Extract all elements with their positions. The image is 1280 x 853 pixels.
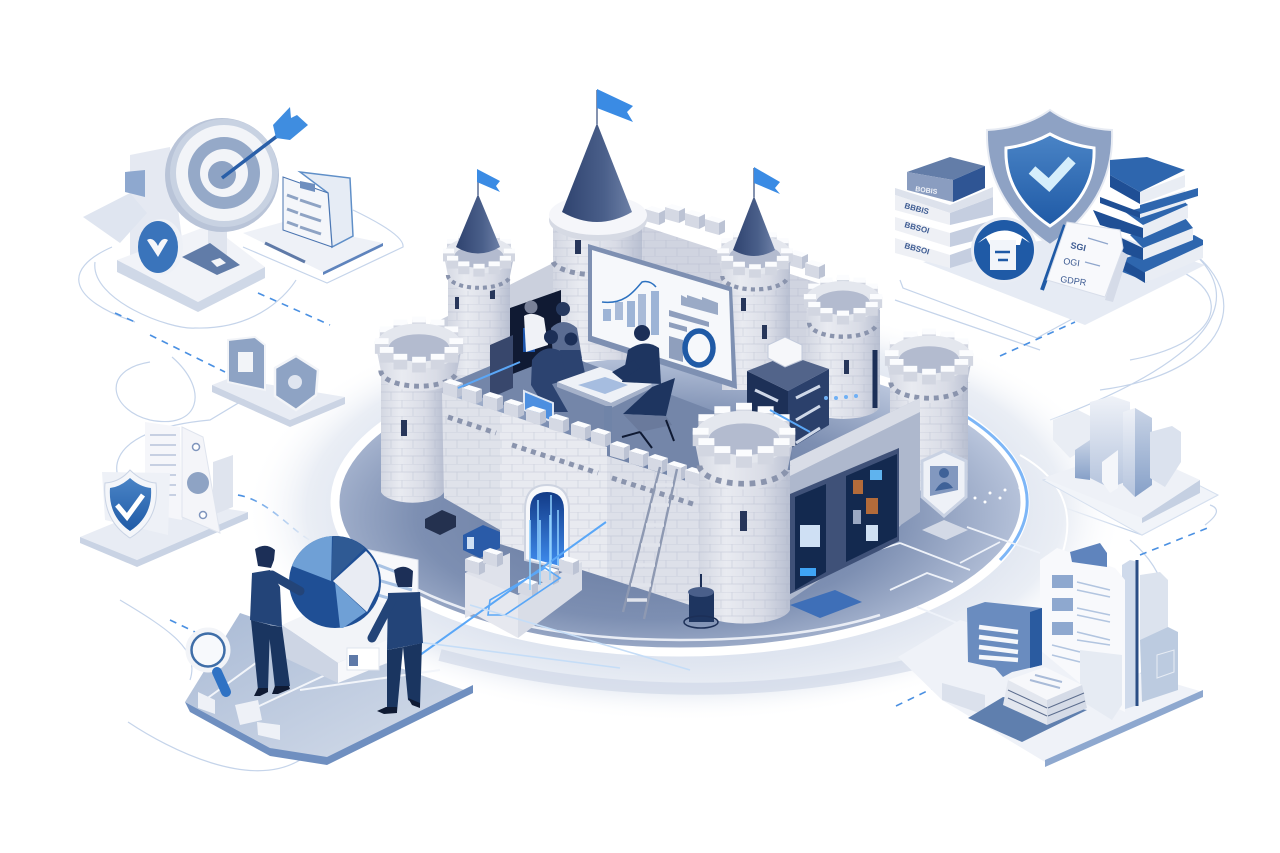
platform xyxy=(898,620,1203,767)
blue mat xyxy=(968,697,1087,742)
big back tower with cone and flag xyxy=(549,89,647,360)
vignette: shield and compliance, top right xyxy=(895,110,1205,325)
GDPR document: OGI xyxy=(1063,256,1080,268)
back wall xyxy=(640,204,870,380)
curved fin xyxy=(182,427,220,533)
shield with check xyxy=(105,470,156,538)
shield tile xyxy=(275,356,318,410)
check badge xyxy=(138,219,183,275)
base disc: outer halo xyxy=(245,298,1125,722)
blue dashed flow lines xyxy=(115,293,1210,706)
barrel xyxy=(684,574,718,628)
floor token xyxy=(790,590,862,618)
side blocks xyxy=(1140,572,1178,702)
thin plate xyxy=(1043,450,1218,535)
vignette: documents and chat, bottom right xyxy=(898,543,1203,767)
card xyxy=(182,243,240,275)
arrow xyxy=(222,107,308,178)
plinth xyxy=(1043,448,1200,523)
ID shield sign xyxy=(922,451,968,540)
book pile xyxy=(1003,667,1087,725)
right curtain wall xyxy=(607,441,705,609)
low front wall xyxy=(465,548,582,638)
man right xyxy=(372,567,423,714)
striped page xyxy=(145,422,182,520)
low left block xyxy=(83,193,147,243)
report sheet xyxy=(360,548,418,640)
base platform xyxy=(117,225,265,312)
pie chart xyxy=(289,536,381,628)
platform xyxy=(185,613,473,765)
documents binder xyxy=(283,172,353,247)
pedestal box xyxy=(282,590,420,683)
magnifier xyxy=(188,630,228,692)
slanted right wall with screens xyxy=(790,398,920,600)
front block xyxy=(1080,650,1122,720)
chat bubble xyxy=(967,602,1042,677)
front-left wall and gatehouse with blue portal xyxy=(442,379,611,578)
vignette: analysts with pie chart, bottom left xyxy=(185,536,473,765)
left stacked boxes: BBSOI xyxy=(903,241,930,256)
plinth xyxy=(212,378,345,427)
left stacked boxes: BBBIS xyxy=(903,201,930,217)
platform xyxy=(923,230,1205,325)
vignette: target and checklist, top left xyxy=(83,107,383,312)
plinth xyxy=(80,500,248,567)
right-mid tower xyxy=(804,275,882,419)
meeting table, chair and four people xyxy=(524,300,675,448)
man left xyxy=(250,546,300,696)
GDPR document xyxy=(1047,222,1128,302)
left stacked boxes: BBSOI xyxy=(903,220,930,235)
front-left tower xyxy=(375,317,463,503)
vignette: abstract blocks, right xyxy=(1043,396,1218,535)
large shield with check xyxy=(987,110,1112,245)
vignette: security icons platform, mid left xyxy=(212,337,345,427)
small boxes in yard xyxy=(425,510,500,558)
blue side block xyxy=(125,170,145,197)
ladder xyxy=(623,467,677,619)
housing block behind target xyxy=(130,147,190,300)
back sheet xyxy=(102,472,170,535)
blue books stack xyxy=(1093,157,1203,283)
dark doorway and servers behind meeting xyxy=(490,290,561,398)
presentation board with charts xyxy=(588,244,737,389)
lock document tile xyxy=(228,337,265,390)
GDPR document: GDPR xyxy=(1060,274,1087,288)
left stacked boxes xyxy=(895,157,993,268)
back-right tower with cone and flag xyxy=(717,167,793,390)
checklist platform xyxy=(243,222,383,275)
far-right tower xyxy=(885,329,973,491)
blocks xyxy=(1053,396,1181,497)
pen xyxy=(1042,225,1065,290)
courtyard floor xyxy=(445,345,800,520)
castle xyxy=(375,89,973,670)
base disc: ring and floor xyxy=(335,352,1067,689)
front-right tower xyxy=(693,403,795,624)
blue round badge xyxy=(971,217,1037,283)
report book xyxy=(1040,543,1138,712)
target xyxy=(165,118,279,232)
GDPR document: SGI xyxy=(1070,240,1087,253)
small white blocks xyxy=(198,692,280,740)
connecting lines and dashed arrows xyxy=(79,210,1224,771)
back-left wall xyxy=(440,262,555,400)
glowing data streams xyxy=(402,362,810,670)
back-left tower with cone and flag xyxy=(443,169,515,380)
target post xyxy=(208,225,227,255)
vignette: shield and documents, left xyxy=(80,422,248,567)
side block xyxy=(213,455,233,515)
left stacked boxes: BOBIS xyxy=(915,186,938,196)
server rack with cube xyxy=(747,337,875,450)
